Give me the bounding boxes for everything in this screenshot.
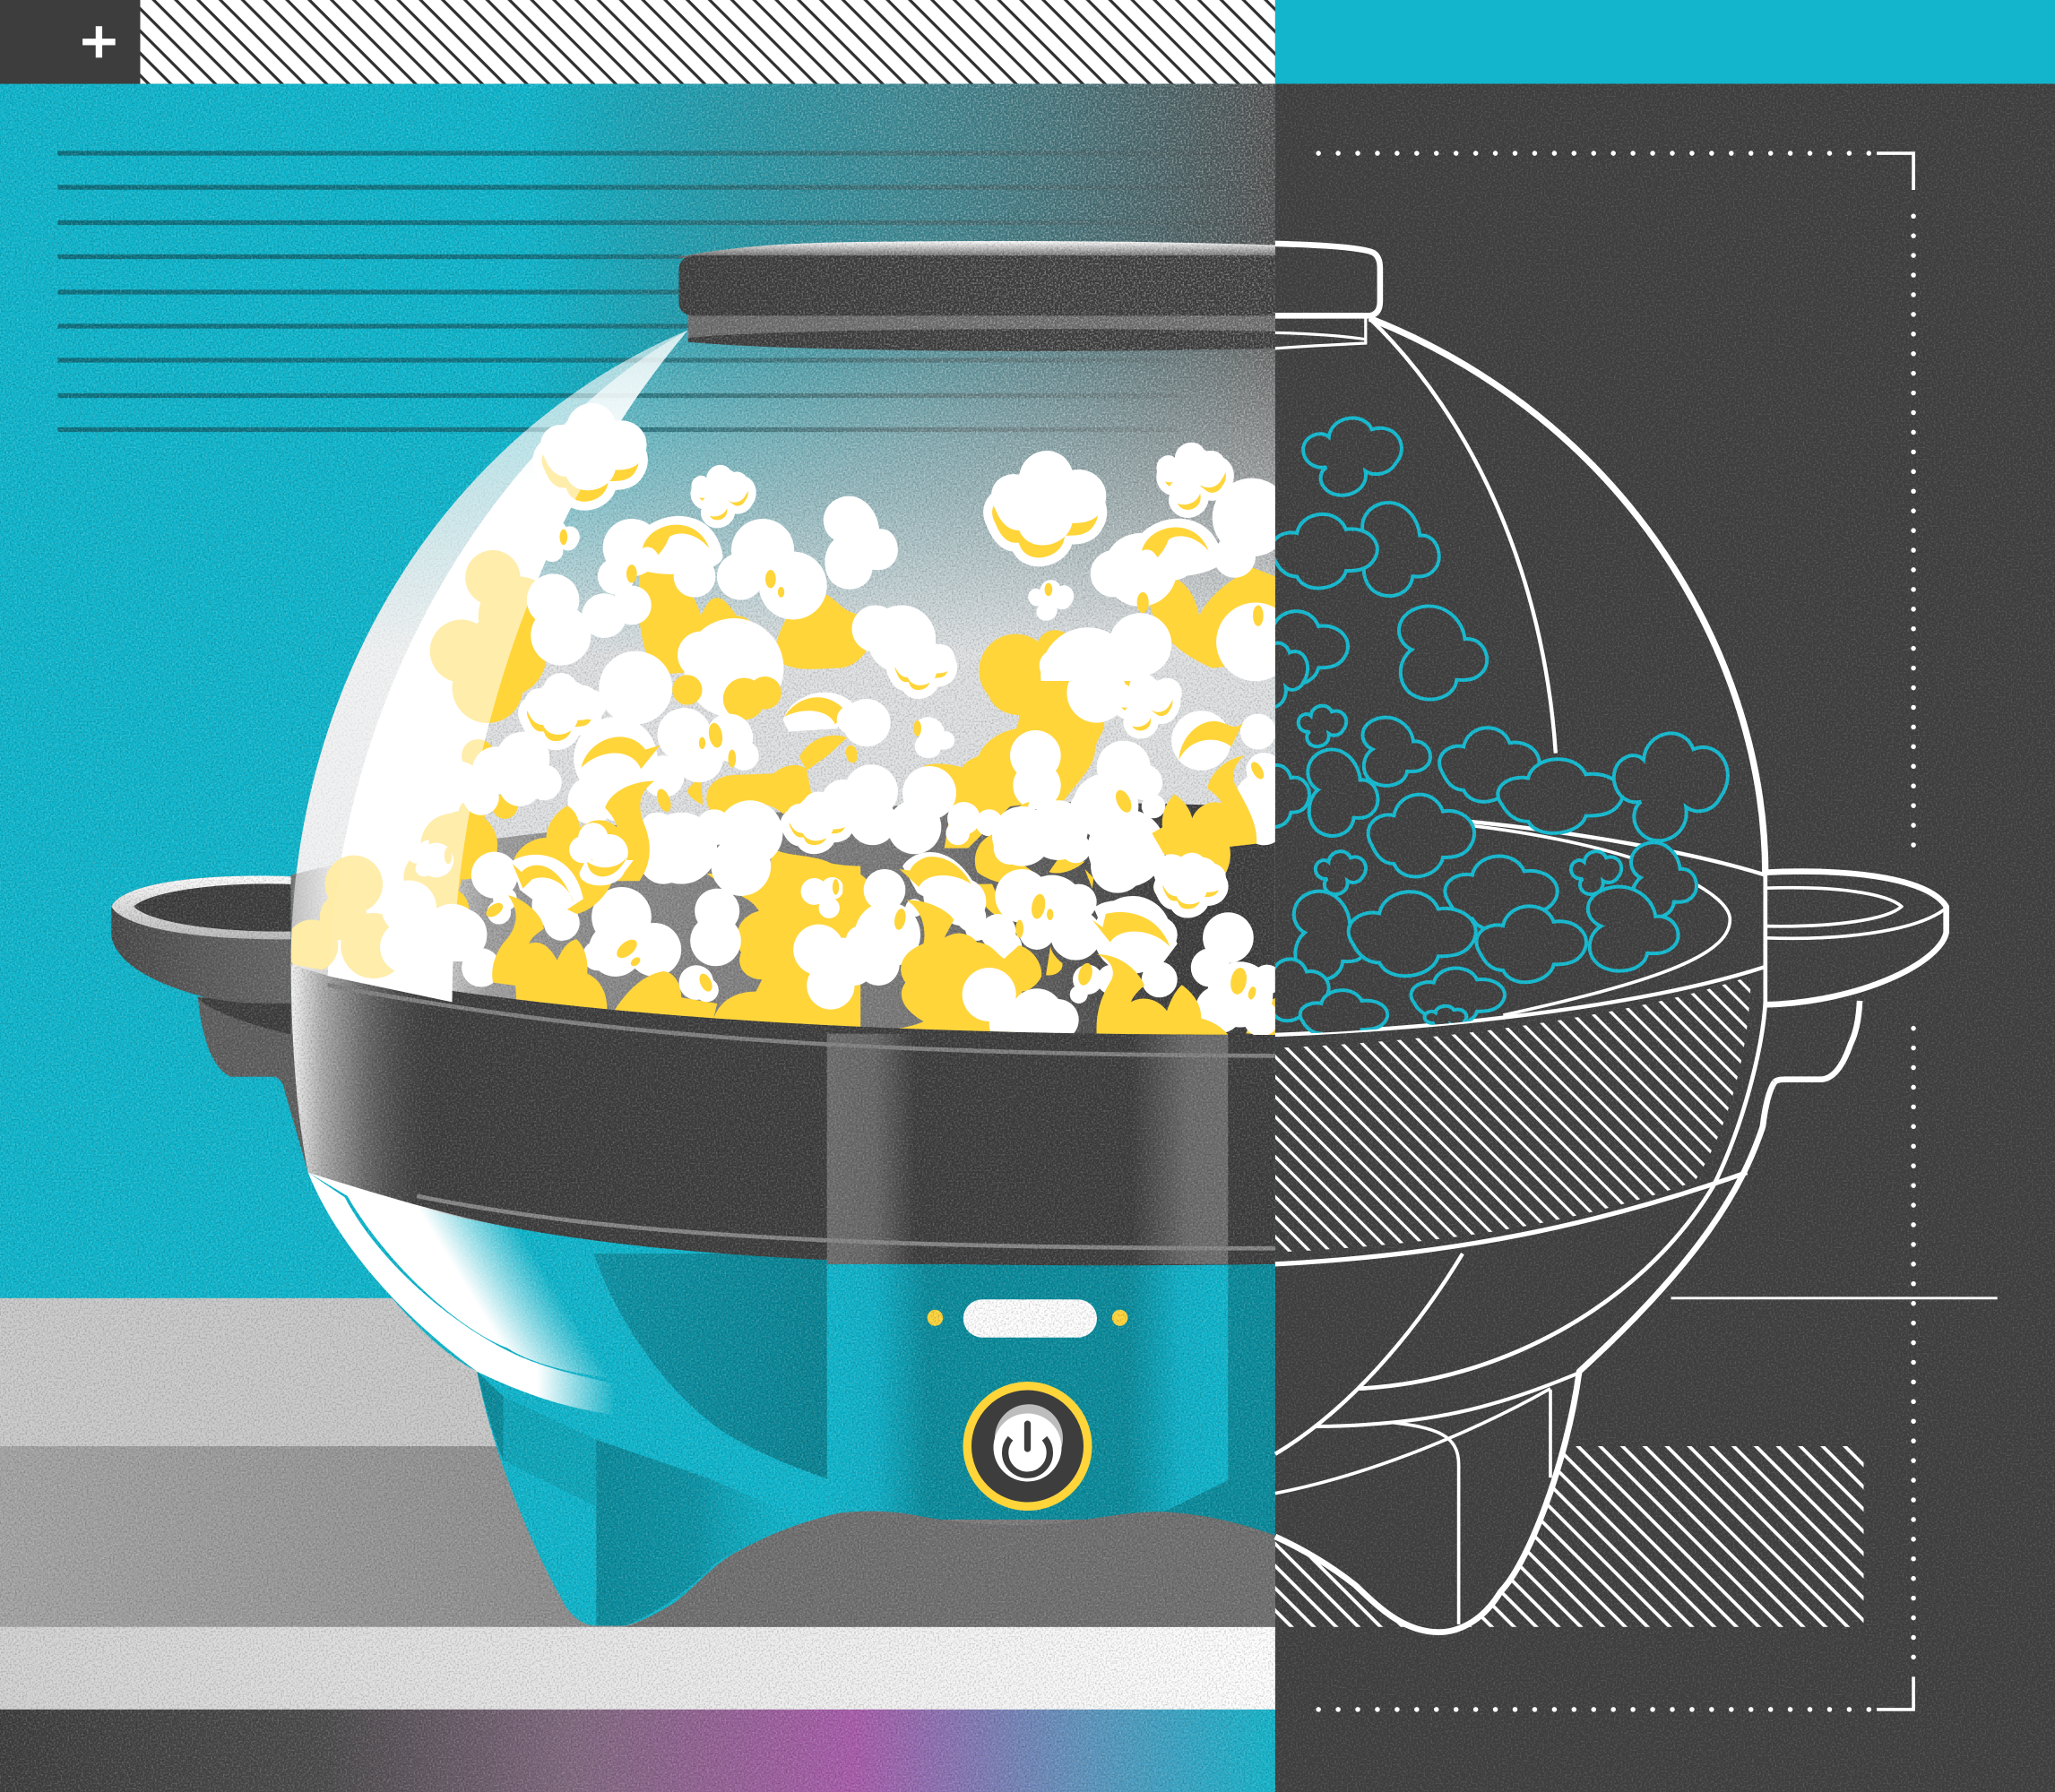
glass dome interior bbox=[291, 314, 1275, 1035]
blueprint hatching: band bbox=[1275, 969, 1766, 1258]
bowl back inside dome bbox=[291, 802, 1275, 1035]
left handle bbox=[111, 875, 321, 1172]
blueprint leg fill bbox=[1275, 1310, 1585, 1633]
blueprint frame lines bbox=[1318, 153, 1998, 1710]
small popcorn and cluster on light gap bbox=[913, 673, 1177, 758]
grain left side bbox=[0, 84, 1275, 1792]
teal base and leg bbox=[308, 1172, 1275, 1625]
glass highlight solid bbox=[328, 330, 688, 1002]
blueprint dome and leg thick outline bbox=[1275, 318, 1947, 1633]
control panel bbox=[928, 1299, 1127, 1338]
lid bbox=[679, 241, 1275, 351]
popcorn realistic half bbox=[286, 403, 1295, 1046]
grain right side bbox=[1275, 84, 2055, 1792]
popcorn upper layer bbox=[286, 403, 1295, 978]
top strip bbox=[0, 0, 2055, 84]
floor bands bbox=[0, 1298, 1275, 1792]
grain on faded area bbox=[640, 84, 1275, 659]
base band bbox=[291, 964, 1275, 1265]
blueprint hatching: floor bbox=[1275, 1446, 1863, 1627]
blueprint machine outline bbox=[1275, 244, 1766, 1624]
popcorn outlines blueprint half bbox=[1247, 418, 1728, 1042]
grain left side dark bbox=[0, 84, 1275, 1792]
popcorn lower right layer bbox=[819, 663, 1288, 1046]
glass highlight overlay bbox=[328, 330, 688, 1002]
horizontal lines bbox=[57, 153, 1275, 430]
lower glass reflection bbox=[308, 1172, 708, 1415]
glass outer rim bbox=[291, 330, 688, 976]
floor shadow wave bbox=[626, 1512, 1275, 1627]
popcorn lower left layer bbox=[415, 661, 873, 1033]
power button bbox=[967, 1386, 1088, 1506]
